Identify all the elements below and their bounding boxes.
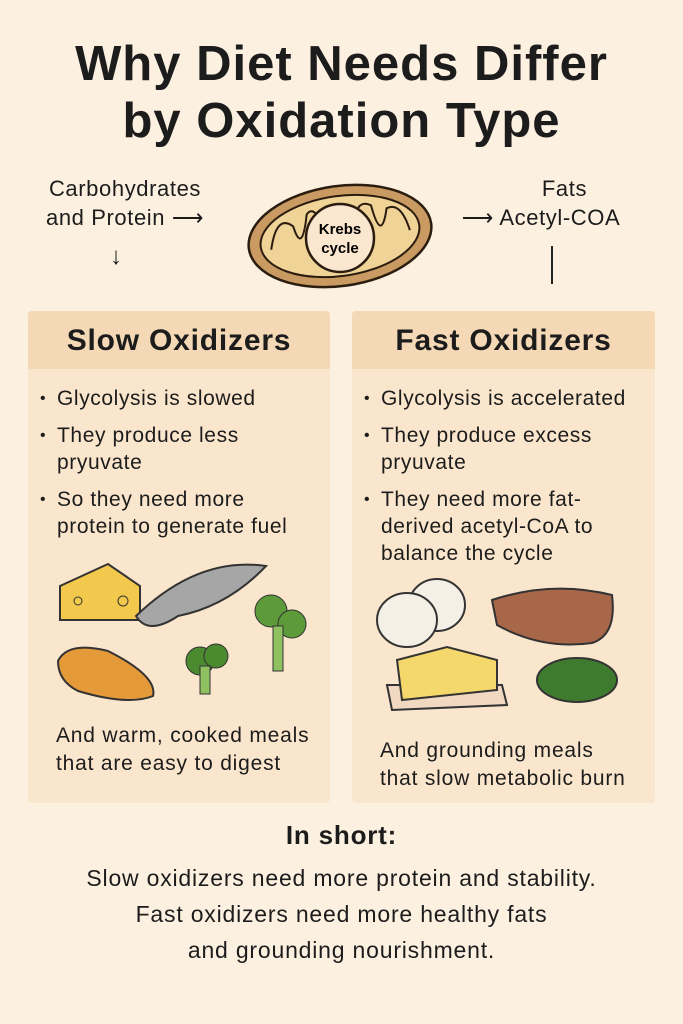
title bbox=[75, 37, 608, 148]
label: carbohydrates: Carbohydrates bbox=[49, 176, 201, 201]
title: Why Diet Needs Differ bbox=[75, 37, 608, 91]
bullets: slow: They produce less bbox=[57, 424, 239, 447]
text: slow footer: that are easy to digest bbox=[56, 752, 281, 775]
heading: slow: Slow Oxidizers bbox=[67, 324, 291, 357]
title: by Oxidation Type bbox=[122, 94, 561, 148]
bullets: slow: pryuvate bbox=[57, 451, 142, 474]
bullets: fast: balance the cycle bbox=[381, 542, 553, 565]
bullets: fast: They produce excess bbox=[381, 424, 592, 447]
summary text: and grounding nourishment. bbox=[188, 937, 495, 963]
panel: slow oxidizers bbox=[28, 311, 330, 803]
label: fats: Fats bbox=[542, 176, 587, 201]
icon: mitochondrion: cycle bbox=[321, 240, 359, 257]
bullets: slow: So they need more bbox=[57, 488, 245, 511]
label: carbohydrates bbox=[46, 176, 204, 230]
icon: mitochondrion bbox=[247, 184, 433, 288]
label: fats: ⟶ Acetyl-COA bbox=[462, 205, 620, 230]
bullets: slow bbox=[40, 387, 287, 538]
bullets: fast: Glycolysis is accelerated bbox=[381, 387, 626, 410]
icon: mitochondrion: Krebs bbox=[319, 221, 361, 238]
text: fast footer bbox=[380, 739, 626, 790]
summary text: Slow oxidizers need more protein and stability. bbox=[86, 865, 597, 891]
bullets: fast: They need more fat- bbox=[381, 488, 582, 511]
text: slow footer: And warm, cooked meals bbox=[56, 724, 309, 747]
label: fats bbox=[462, 176, 620, 230]
arrow: down: ↓ bbox=[110, 243, 122, 270]
bullets: slow: Glycolysis is slowed bbox=[57, 387, 256, 410]
summary text: Fast oxidizers need more healthy fats bbox=[136, 901, 547, 927]
bullets: fast: pryuvate bbox=[381, 451, 466, 474]
text: fast footer: And grounding meals bbox=[380, 739, 594, 762]
text: fast footer: that slow metabolic burn bbox=[380, 767, 626, 790]
heading: fast bbox=[352, 311, 655, 369]
bullets: fast bbox=[364, 387, 626, 565]
panel: fast oxidizers bbox=[352, 311, 655, 803]
bullets: fast: derived acetyl-CoA to bbox=[381, 515, 593, 538]
heading: slow bbox=[28, 311, 330, 369]
summary text bbox=[86, 865, 597, 963]
heading: fast: Fast Oxidizers bbox=[395, 324, 612, 357]
bullets: slow: protein to generate fuel bbox=[57, 515, 287, 538]
label: carbohydrates: and Protein ⟶ bbox=[46, 205, 204, 230]
heading: in short: In short: bbox=[286, 820, 397, 850]
text: slow footer bbox=[56, 724, 309, 775]
icon: foods fast bbox=[376, 578, 618, 711]
line: fats down bbox=[551, 246, 553, 284]
icon: foods slow bbox=[57, 562, 306, 701]
